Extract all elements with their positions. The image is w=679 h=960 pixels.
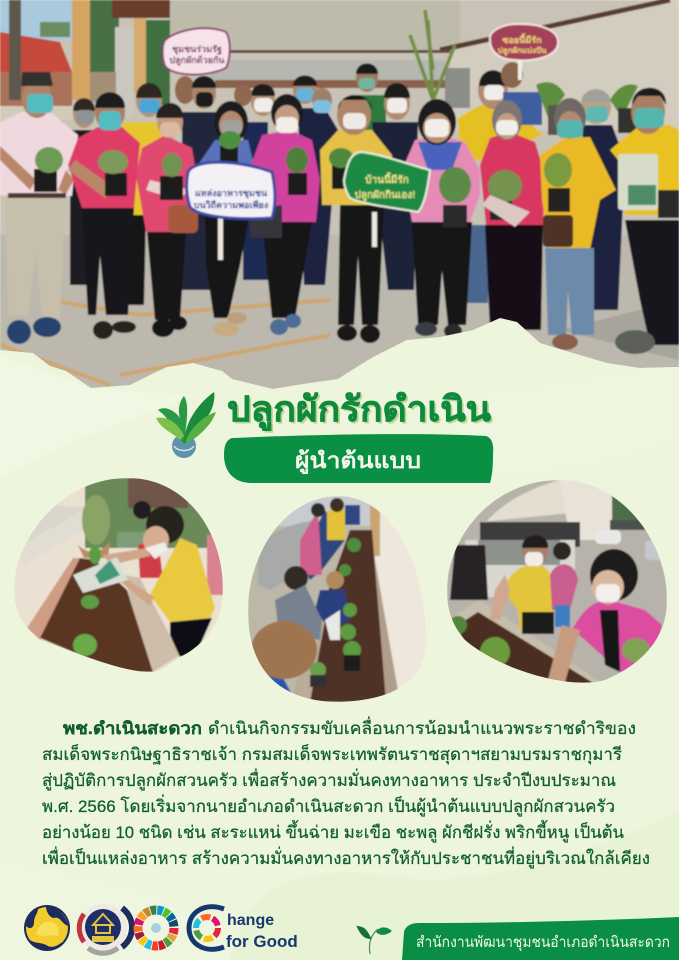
icon: sprout (358, 927, 392, 954)
logo: yellow dragon seal (24, 905, 70, 951)
body paragraph (42, 716, 650, 869)
back row of people (70, 62, 642, 310)
sign: maroon cloud (490, 24, 558, 80)
sign: green home garden: ปลูกผักกินเอง! (355, 189, 415, 202)
photo backdrop: sky, roof, building and ground (0, 0, 679, 400)
sign: maroon cloud: ปลูกผักแบ่งปัน (497, 46, 547, 56)
body paragraph: พ.ศ. 2566 โดยเริ่มจากนายอำเภอดำเนินสะดวก เป็นผู้นำต้นแบบปลูกผักสวนครัว (42, 794, 615, 817)
logo: Change for Good (189, 907, 298, 951)
cream page area with torn top edge (0, 318, 679, 960)
front row: man in yellow shirt with fertilizer bag (610, 88, 679, 354)
subtitle pill (224, 434, 493, 483)
photo: group of people holding seedlings (0, 0, 679, 400)
sign: white and blue food source: แหล่งอาหารชุมชน (195, 188, 268, 199)
front row: woman in magenta shirt (249, 94, 320, 335)
sign: maroon cloud: ซอยนี้มีรัก (502, 33, 542, 45)
sign: green home garden (344, 152, 430, 247)
sign: community pink: ชุมชนร่วมรัฐ (172, 44, 222, 55)
body paragraph: อย่างน้อย 10 ชนิด เช่น สะระแหน่ ขึ้นฉ่าย มะเขือ ชะพลู ผักชีฝรั่ง พริกขี้หนู เป็นต้น (42, 820, 624, 843)
sign: community pink (163, 28, 230, 75)
sign: community pink: ปลูกผักด้วยกัน (169, 55, 225, 66)
front row: woman in pink-red shirt and black skirt (480, 100, 545, 330)
front row: man in yellow shirt with green sign (320, 95, 392, 343)
body paragraph: ดำเนินกิจกรรมขับเคลื่อนการน้อมนำแนวพระราชดำริของ (208, 716, 636, 738)
body paragraph: สู่ปฏิบัติการปลูกผักสวนครัว เพื่อสร้างความมั่นคงทางอาหาร ประจำปีงบประมาณ (42, 768, 616, 791)
footer band (402, 917, 679, 960)
subtitle pill: ผู้นำต้นแบบ (295, 448, 421, 475)
front row: woman in yellow shirt and jeans (540, 98, 616, 350)
front row: woman in red-pink shirt (68, 92, 140, 339)
photo blob 1: man in yellow planting (14, 478, 223, 678)
body paragraph: สมเด็จพระกนิษฐาธิราชเจ้า กรมสมเด็จพระเทพรัตนราชสุดาฯสยามบรมราชกุมารี (42, 743, 622, 765)
body paragraph: พช.ดำเนินสะดวก (63, 719, 202, 738)
front row: woman in pink top with blue collar (402, 99, 480, 338)
photo blob 2: row of people planting (248, 496, 426, 706)
logo: Change for Good: for Good (226, 932, 298, 951)
sign: green home garden: บ้านนี้มีรัก (365, 172, 409, 186)
front row: man in pale pink shirt (0, 72, 78, 344)
photo blob 3: man and woman planting (447, 480, 667, 690)
body paragraph: เพื่อเป็นแหล่งอาหาร สร้างความมั่นคงทางอาหารให้กับประชาชนที่อยู่บริเวณใกล้เคียง (42, 846, 650, 869)
front row: woman in blue and pink top (198, 101, 254, 336)
logo: Change for Good: hange (227, 912, 274, 929)
title: ปลูกผักรักดำเนิน (227, 390, 491, 431)
title: ปลูกผักรักดำเนิน (229, 392, 493, 433)
logo: SDG wheel (131, 903, 181, 953)
sign: white and blue food source (187, 162, 275, 260)
title icon: seedling in blue pot (156, 392, 216, 458)
logo: community development emblem (79, 904, 132, 953)
sign: white and blue food source: บนวิถีความพอเพียง (194, 200, 268, 210)
front row: woman in pink shirt with brown bag (136, 103, 198, 337)
